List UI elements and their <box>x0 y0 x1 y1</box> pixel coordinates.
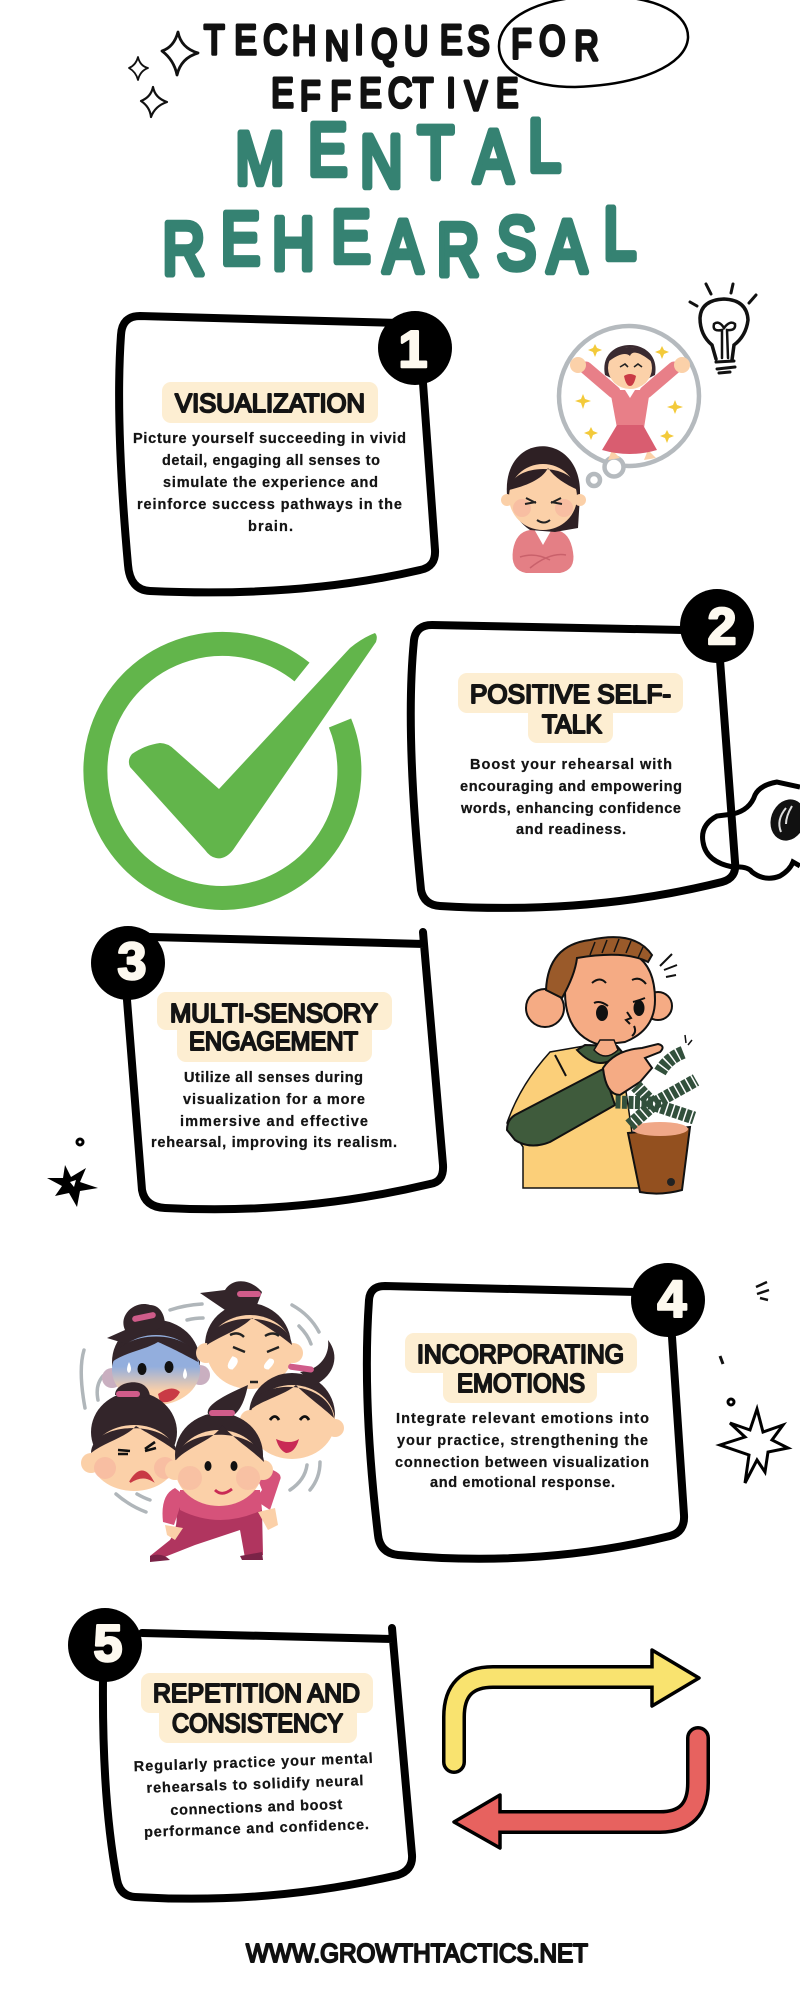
body text: detail, engaging all senses to <box>162 453 380 469</box>
card outline <box>127 932 443 1209</box>
body text: connections and boost <box>170 1797 343 1819</box>
figure: smiling girl <box>150 1385 281 1562</box>
body text: words, enhancing confidence <box>460 801 681 817</box>
panel: repetition and consistency <box>68 1608 412 1899</box>
title line: mental rehearsal: MENTAL <box>235 105 561 204</box>
body text: simulate the experience and <box>163 475 378 491</box>
card outline <box>367 1286 684 1559</box>
arrow: yellow <box>454 1650 699 1762</box>
heading <box>157 992 392 1062</box>
arrow: red <box>454 1738 698 1848</box>
title line: techniques for effective: EFFECTIVE <box>271 71 518 120</box>
yellow stars <box>575 344 683 443</box>
potted plant <box>628 1127 690 1194</box>
number badge 5: 5 <box>94 1615 122 1673</box>
heading: ENGAGEMENT <box>189 1026 358 1056</box>
doodle: star and marks right <box>720 1282 788 1483</box>
heading: CONSISTENCY <box>172 1708 343 1738</box>
heading: REPETITION AND <box>153 1678 360 1708</box>
illustration: boy touching a plant <box>507 937 696 1194</box>
icon: green check mark <box>95 633 377 898</box>
body text: Picture yourself succeeding in vivid <box>133 431 406 447</box>
body text <box>395 1411 649 1491</box>
body text: your practice, strengthening the <box>397 1433 648 1449</box>
title line: mental rehearsal: REHEARSAL <box>162 193 636 292</box>
body text: reinforce success pathways in the <box>137 497 402 513</box>
thinking girl <box>501 446 586 573</box>
body text: Boost your rehearsal with <box>470 757 672 773</box>
face: angry <box>81 1382 187 1491</box>
happy girl <box>570 345 690 460</box>
body text: immersive and effective <box>180 1114 368 1130</box>
body text <box>133 431 406 535</box>
body text: brain. <box>248 519 293 535</box>
body text: performance and confidence. <box>144 1817 369 1841</box>
title line: mental rehearsal <box>162 105 636 292</box>
body text: Utilize all senses during <box>184 1070 363 1086</box>
title <box>162 18 636 292</box>
body text <box>134 1751 375 1841</box>
head <box>526 989 564 1027</box>
face: crying <box>196 1281 303 1389</box>
body text: Integrate relevant emotions into <box>396 1411 649 1427</box>
heading: VISUALIZATION <box>175 388 365 418</box>
body text: rehearsal, improving its realism. <box>151 1135 397 1151</box>
heading <box>405 1333 637 1403</box>
number badge 2 <box>680 589 754 663</box>
shirt <box>507 1045 640 1188</box>
number badge 1 <box>378 311 452 385</box>
panel: incorporating emotions <box>367 1263 705 1559</box>
panel: positive self-talk <box>411 589 754 908</box>
title line: techniques for effective <box>204 18 599 120</box>
illustration: five emotion faces <box>81 1281 344 1562</box>
heading: POSITIVE SELF- <box>470 679 671 709</box>
sleeve <box>507 1069 615 1146</box>
number badge 5 <box>68 1608 142 1682</box>
panel: visualization <box>119 311 452 592</box>
face: scared blue <box>102 1304 210 1405</box>
oval around FOR <box>499 0 688 87</box>
body text: and readiness. <box>516 822 626 838</box>
number badge 1: 1 <box>399 321 427 379</box>
heading <box>141 1673 373 1743</box>
body text: encouraging and empowering <box>460 779 682 795</box>
body text: visualization for a more <box>183 1092 365 1108</box>
doodle: scribble blob <box>703 782 800 878</box>
body text: connection between visualization <box>395 1455 649 1471</box>
body text: Regularly practice your mental <box>134 1751 373 1775</box>
number badge 4: 4 <box>658 1271 687 1329</box>
body text: rehearsals to solidify neural <box>146 1773 364 1797</box>
illustration: girl imagining success <box>501 326 699 573</box>
icon: sparkles <box>129 32 198 117</box>
footer website: WWW.GROWTHTACTICS.NET <box>246 1938 588 1968</box>
body text <box>151 1070 397 1151</box>
heading: INCORPORATING <box>417 1339 624 1369</box>
heading: MULTI-SENSORY <box>170 998 378 1028</box>
heading <box>162 382 378 423</box>
number badge 4 <box>631 1263 705 1337</box>
body text: and emotional response. <box>430 1475 615 1491</box>
number badge 3: 3 <box>118 933 146 991</box>
pointing hand <box>603 1044 663 1095</box>
face: laughing <box>240 1340 344 1459</box>
thought bubble <box>559 326 699 486</box>
number badge 2: 2 <box>708 598 736 656</box>
title line: techniques for effective: TECHNIQUESFOR <box>204 18 599 70</box>
icon: light bulb <box>690 284 756 373</box>
heading <box>458 673 683 743</box>
heading: TALK <box>542 709 603 739</box>
card outline <box>103 1628 412 1899</box>
heading: EMOTIONS <box>457 1368 585 1398</box>
card outline <box>119 316 435 592</box>
body text <box>460 757 682 838</box>
doodle: star and dot left <box>47 1139 98 1207</box>
motion lines <box>81 1304 320 1512</box>
panel: multi-sensory engagement <box>91 926 443 1209</box>
card outline <box>411 625 735 908</box>
number badge 3 <box>91 926 165 1000</box>
